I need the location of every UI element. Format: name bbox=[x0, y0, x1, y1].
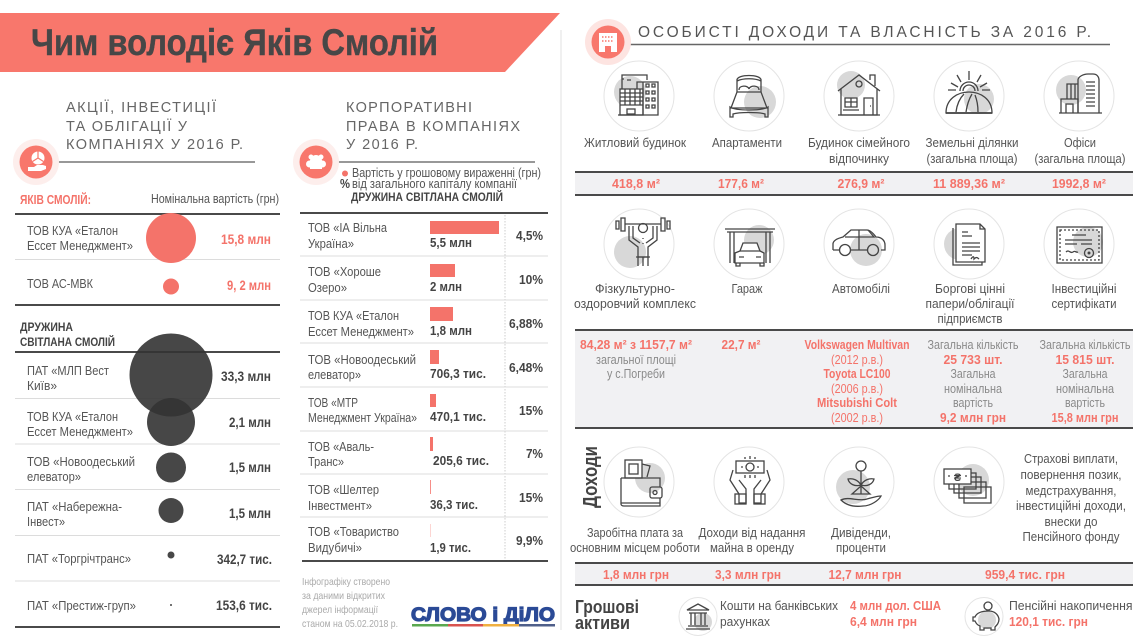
label: other income list: внески до bbox=[1044, 515, 1098, 529]
icon: investment certificate bbox=[1044, 209, 1114, 279]
bar row: Khoroshe Ozero: 10% bbox=[519, 273, 543, 287]
bar row: MTR Management Ukraine: Менеджмент Україна» bbox=[308, 411, 417, 425]
bubble row: Torgrichtrans: ПАТ «Торгрічтранс» bbox=[27, 552, 131, 566]
bar row: Novoodesky elevator: 706,3 тис. bbox=[430, 367, 486, 381]
bar row: Aval-Trans: 7% bbox=[526, 447, 543, 461]
labels: other assets: папери/облігації bbox=[926, 297, 1015, 311]
value band: areas: 418,8 м² bbox=[612, 177, 660, 191]
labels: real estate: Апартаменти bbox=[712, 136, 782, 150]
logo: Slovo i Dilo: СЛОВО і ДіЛО bbox=[411, 605, 555, 626]
values: certificates bbox=[1040, 338, 1130, 425]
values: bonds bbox=[928, 338, 1018, 425]
labels: other assets: Боргові цінні bbox=[935, 282, 1005, 296]
legend: corporate rights bbox=[340, 166, 541, 204]
bubble row: Etalon (wife): ТОВ КУА «Еталон bbox=[27, 410, 118, 424]
row: other assets icons bbox=[604, 209, 1114, 279]
values: bonds: Загальна bbox=[950, 367, 996, 381]
labels: other assets bbox=[574, 282, 1117, 326]
labels: real estate: (загальна площа) bbox=[1034, 152, 1126, 166]
source note: джерел інформації bbox=[302, 604, 378, 616]
bar row: Etalon: Ессет Менеджмент» bbox=[308, 325, 414, 339]
bar row: Khoroshe Ozero: ТОВ «Хороше bbox=[308, 265, 381, 279]
labels: real estate bbox=[584, 136, 1126, 166]
icon: land and sun bbox=[934, 61, 1004, 131]
bar row: Khoroshe Ozero bbox=[308, 264, 543, 295]
panel: personal income and property bbox=[570, 19, 1133, 636]
bubble row: MLP West Kyiv bbox=[27, 334, 271, 416]
bar row: Etalon: 6,88% bbox=[509, 317, 543, 331]
heading: shares section: АКЦІЇ, ІНВЕСТИЦІЇ bbox=[66, 99, 216, 116]
label: bank accounts: рахунках bbox=[720, 615, 771, 629]
bubble row: Etalon (wife): 2,1 млн bbox=[229, 415, 271, 430]
values: certificates: вартість bbox=[1065, 396, 1105, 410]
icon: apartment building bbox=[604, 61, 674, 131]
value band: income: 3,3 млн грн bbox=[715, 568, 781, 582]
label: bank accounts bbox=[720, 599, 941, 629]
labels: real estate: Офіси bbox=[1064, 136, 1096, 150]
icon: bond document bbox=[934, 209, 1004, 279]
label: pension savings: 120,1 тис. грн bbox=[1009, 615, 1088, 629]
bubble row: Novoodesky elevator: ТОВ «Новоодеський bbox=[27, 455, 135, 469]
values: sports complex: загальної площі bbox=[596, 353, 676, 367]
bubble row: Naberezhna-Invest bbox=[27, 498, 271, 529]
bubble row: Novoodesky elevator: 1,5 млн bbox=[229, 460, 271, 475]
bar row: Etalon bbox=[308, 307, 543, 339]
bar row: Novoodesky elevator: 6,48% bbox=[509, 361, 543, 375]
values: cars: Volkswagen Multivan bbox=[804, 338, 910, 352]
labels: real estate: Земельні ділянки bbox=[926, 136, 1019, 150]
legend: corporate rights: ДРУЖИНА СВІТЛАНА СМОЛІЙ bbox=[351, 189, 503, 204]
bubble row: AS-MVK bbox=[27, 277, 271, 294]
heading: wife: ДРУЖИНА bbox=[20, 320, 73, 334]
bubble row: MLP West Kyiv: Київ» bbox=[27, 379, 57, 393]
bubble row: Naberezhna-Invest: Інвест» bbox=[27, 515, 65, 529]
heading: monetary assets bbox=[575, 597, 639, 633]
values: bonds: 25 733 шт. bbox=[944, 353, 1002, 367]
icon: hands with banknote bbox=[714, 447, 784, 517]
labels: real estate: Житловий будинок bbox=[584, 136, 686, 150]
values: bonds: вартість bbox=[953, 396, 993, 410]
heading: monetary assets: Грошові bbox=[575, 597, 639, 617]
value band: income: 959,4 тис. грн bbox=[985, 568, 1065, 582]
heading: shares section bbox=[50, 99, 255, 162]
heading: monetary assets: активи bbox=[575, 613, 630, 633]
bubble row: Novoodesky elevator bbox=[27, 452, 271, 484]
bar row: Etalon: ТОВ КУА «Еталон bbox=[308, 309, 399, 323]
icon: wallet with salary bbox=[604, 447, 674, 517]
labels: real estate: (загальна площа) bbox=[926, 152, 1018, 166]
label: other income list: медстрахування, bbox=[1026, 484, 1116, 498]
values: certificates: 15,8 млн грн bbox=[1052, 411, 1118, 425]
heading: shares section: ТА ОБЛІГАЦІЇ У bbox=[66, 118, 188, 135]
values: sports complex: 84,28 м² з 1157,7 м² bbox=[580, 338, 692, 352]
heading: corporate rights: У 2016 Р. bbox=[346, 137, 418, 153]
bubble row: AS-MVK: 9, 2 млн bbox=[227, 278, 271, 293]
values: cars: (2012 р.в.) bbox=[831, 353, 883, 367]
bar row: Tovarystvo Vydubychi bbox=[308, 524, 543, 555]
bar row: Aval-Trans bbox=[308, 437, 543, 469]
bar row: Shelter Investment bbox=[308, 480, 543, 513]
bar row: IA Vilna Ukraina bbox=[308, 221, 543, 251]
title banner: Чим володіє Яків Смолій bbox=[31, 22, 438, 63]
labels: real estate: Будинок сімейного bbox=[808, 136, 910, 150]
values: garage: 22,7 м² bbox=[722, 338, 760, 352]
source note: станом на 05.02.2018 р. bbox=[302, 618, 398, 630]
values: certificates: номінальна bbox=[1056, 382, 1114, 396]
values: bonds: Загальна кількість bbox=[928, 338, 1018, 352]
legend: Yakiv Smoliy header bbox=[20, 192, 279, 207]
legend: corporate rights: від загального капіталу компанії bbox=[352, 177, 517, 191]
bubble row: Torgrichtrans: 342,7 тис. bbox=[217, 552, 272, 567]
bar row: MTR Management Ukraine: 15% bbox=[519, 404, 543, 418]
heading: income: Доходи bbox=[580, 446, 602, 508]
bar row: Etalon: 1,8 млн bbox=[430, 324, 472, 338]
source note: Інфографіку створено bbox=[302, 576, 390, 588]
values: cars: Mitsubishi Colt bbox=[817, 396, 898, 410]
source note: за даними відкритих bbox=[302, 590, 386, 602]
icon: hand holding pie bbox=[13, 139, 59, 185]
label: other income list: інвестиційні доходи, bbox=[1016, 499, 1126, 513]
label: bank accounts: 4 млн дол. США bbox=[850, 599, 941, 613]
bar row: MTR Management Ukraine: 470,1 тис. bbox=[430, 410, 486, 424]
bubble row: Etalon: Ессет Менеджмент» bbox=[27, 239, 133, 253]
values: bonds: номінальна bbox=[944, 382, 1002, 396]
bar row: Shelter Investment: Інвестмент» bbox=[308, 499, 372, 513]
bubble row: Etalon bbox=[27, 213, 271, 263]
bubble row: Prestige group bbox=[27, 598, 272, 613]
icon: stack of money: ₴ bbox=[954, 472, 962, 484]
bar row: IA Vilna Ukraina: 4,5% bbox=[516, 229, 543, 243]
legend: corporate rights: % bbox=[340, 177, 350, 191]
labels: income bbox=[570, 526, 891, 555]
icon: weightlifter bbox=[604, 209, 674, 279]
value band: income: 1,8 млн грн bbox=[603, 568, 669, 582]
bar row: Shelter Investment: 36,3 тис. bbox=[430, 498, 478, 512]
bar row: IA Vilna Ukraina: Україна» bbox=[308, 237, 354, 251]
values: cars: (2002 р.в.) bbox=[831, 411, 883, 425]
bubble row: Torgrichtrans bbox=[27, 552, 272, 567]
values: sports complex bbox=[580, 338, 692, 381]
values: cars: Toyota LC100 bbox=[824, 367, 891, 381]
bubble row: MLP West Kyiv: 33,3 млн bbox=[221, 369, 271, 384]
value band: income bbox=[575, 563, 1133, 585]
icon: bed bbox=[714, 61, 784, 131]
bar row: Tovarystvo Vydubychi: 1,9 тис. bbox=[430, 541, 471, 555]
label: pension savings bbox=[1009, 599, 1132, 629]
label: other income list bbox=[1016, 452, 1126, 544]
labels: income: майна в оренду bbox=[710, 541, 795, 555]
legend: corporate rights: Вартість у грошовому вираженні (грн) bbox=[352, 166, 541, 180]
icon: bank bbox=[679, 598, 717, 636]
icon: flower handshake bbox=[293, 139, 339, 185]
labels: income: основним місцем роботи bbox=[570, 541, 700, 555]
bar row: Shelter Investment: ТОВ «Шелтер bbox=[308, 483, 379, 497]
row: real estate icons bbox=[604, 61, 1114, 131]
values: certificates: 15 815 шт. bbox=[1056, 353, 1114, 367]
labels: other assets: Автомобілі bbox=[832, 282, 890, 296]
bubble row: Etalon (wife) bbox=[27, 398, 271, 446]
bar row: Novoodesky elevator bbox=[308, 350, 543, 382]
labels: other assets: підприємств bbox=[938, 312, 1003, 326]
labels: other assets: Гараж bbox=[732, 282, 763, 296]
bar row: MTR Management Ukraine: ТОВ «МТР bbox=[308, 396, 358, 410]
label: other income list: Пенсійного фонду bbox=[1022, 530, 1120, 544]
heading: wife: СВІТЛАНА СМОЛІЙ bbox=[20, 334, 115, 349]
bubble row: Prestige group: 153,6 тис. bbox=[216, 598, 272, 613]
value band: areas bbox=[575, 172, 1133, 195]
bar row: Shelter Investment: 15% bbox=[519, 491, 543, 505]
legend: Yakiv Smoliy header: ЯКІВ СМОЛІЙ: bbox=[20, 192, 91, 207]
bubble row: AS-MVK: ТОВ АС-МВК bbox=[27, 277, 94, 291]
labels: income: Заробітна плата за bbox=[587, 526, 683, 540]
value band: income: 12,7 млн грн bbox=[828, 568, 902, 582]
bar row: IA Vilna Ukraina: ТОВ «ІА Вільна bbox=[308, 221, 387, 235]
label: other income list: повернення позик, bbox=[1020, 468, 1122, 482]
source note bbox=[302, 576, 398, 630]
bubble row: Etalon: 15,8 млн bbox=[221, 232, 271, 247]
icon: car bbox=[824, 209, 894, 279]
bubble row: Naberezhna-Invest: 1,5 млн bbox=[229, 506, 271, 521]
heading: personal income: ОСОБИСТІ ДОХОДИ ТА ВЛАСНІСТЬ ЗА 2016 Р. bbox=[638, 24, 1091, 41]
values: sports complex: у с.Погреби bbox=[607, 367, 665, 381]
panel: corporate rights bbox=[293, 100, 548, 561]
icon: stack of money bbox=[934, 447, 1004, 517]
values: certificates: Загальна bbox=[1062, 367, 1108, 381]
value band: other assets bbox=[575, 330, 1133, 428]
icon: family house bbox=[824, 61, 894, 131]
bar row: MTR Management Ukraine bbox=[308, 394, 543, 425]
bubble row: MLP West Kyiv: ПАТ «МЛП Вест bbox=[27, 364, 109, 378]
bar row: Tovarystvo Vydubychi: 9,9% bbox=[516, 534, 543, 548]
bar row: Novoodesky elevator: ТОВ «Новоодеський bbox=[308, 353, 416, 367]
labels: income: Доходи від надання bbox=[698, 526, 806, 540]
label: bank accounts: Кошти на банківських bbox=[720, 599, 839, 613]
bar row: Novoodesky elevator: елеватор» bbox=[308, 368, 361, 382]
bubble row: Naberezhna-Invest: ПАТ «Набережна- bbox=[27, 500, 122, 514]
labels: other assets: оздоровчий комплекс bbox=[574, 297, 696, 311]
bubble row: Etalon: ТОВ КУА «Еталон bbox=[27, 224, 118, 238]
bar row: IA Vilna Ukraina: 5,5 млн bbox=[430, 236, 472, 250]
bubble row: Prestige group: ПАТ «Престиж-груп» bbox=[27, 599, 136, 613]
row: income icons bbox=[604, 447, 1004, 517]
value band: areas: 177,6 м² bbox=[718, 177, 764, 191]
bar row: Khoroshe Ozero: Озеро» bbox=[308, 281, 347, 295]
label: other income list: Страхові виплати, bbox=[1024, 452, 1118, 466]
value band: areas: 276,9 м² bbox=[838, 177, 884, 191]
legend: Yakiv Smoliy header: Номінальна вартість (грн) bbox=[151, 192, 279, 206]
label: pension savings: Пенсійні накопичення bbox=[1009, 599, 1132, 613]
bar row: Tovarystvo Vydubychi: ТОВ «Товариство bbox=[308, 525, 399, 539]
labels: income: проценти bbox=[836, 541, 886, 555]
icon: office tower bbox=[1044, 61, 1114, 131]
values: cars: (2006 р.в.) bbox=[831, 382, 883, 396]
heading: corporate rights: ПРАВА В КОМПАНІЯХ bbox=[346, 119, 520, 135]
values: cars bbox=[804, 338, 910, 425]
bubble row: Etalon (wife): Ессет Менеджмент» bbox=[27, 425, 133, 439]
bar row: Aval-Trans: ТОВ «Аваль- bbox=[308, 440, 374, 454]
bubble row: Novoodesky elevator: елеватор» bbox=[27, 470, 81, 484]
labels: real estate: відпочинку bbox=[829, 152, 890, 166]
title banner bbox=[0, 13, 560, 72]
icon: office block bbox=[585, 19, 631, 65]
heading: wife bbox=[20, 320, 115, 349]
value band: areas: 1992,8 м² bbox=[1052, 177, 1106, 191]
bar row: Khoroshe Ozero: 2 млн bbox=[430, 280, 462, 294]
label: bank accounts: 6,4 млн грн bbox=[850, 615, 917, 629]
bar row: Aval-Trans: 205,6 тис. bbox=[433, 454, 489, 468]
labels: other assets: Інвестиційні bbox=[1052, 282, 1116, 296]
value band: areas: 11 889,36 м² bbox=[933, 177, 1005, 191]
panel: shares, investments and bonds bbox=[13, 99, 280, 627]
bar row: Tovarystvo Vydubychi: Видубичі» bbox=[308, 541, 362, 555]
values: bonds: 9,2 млн грн bbox=[940, 411, 1006, 425]
labels: other assets: Фізкультурно- bbox=[595, 282, 675, 296]
heading: corporate rights: КОРПОРАТИВНІ bbox=[346, 100, 472, 116]
icon: garage bbox=[714, 209, 784, 279]
icon: plant on hand bbox=[824, 447, 894, 517]
labels: income: Дивіденди, bbox=[831, 526, 891, 540]
bar row: Aval-Trans: Транс» bbox=[308, 455, 344, 469]
heading: shares section: КОМПАНІЯХ У 2016 Р. bbox=[66, 137, 243, 153]
icon: piggy bank bbox=[965, 598, 1003, 636]
labels: other assets: сертифікати bbox=[1052, 297, 1117, 311]
heading: corporate rights bbox=[330, 100, 535, 162]
